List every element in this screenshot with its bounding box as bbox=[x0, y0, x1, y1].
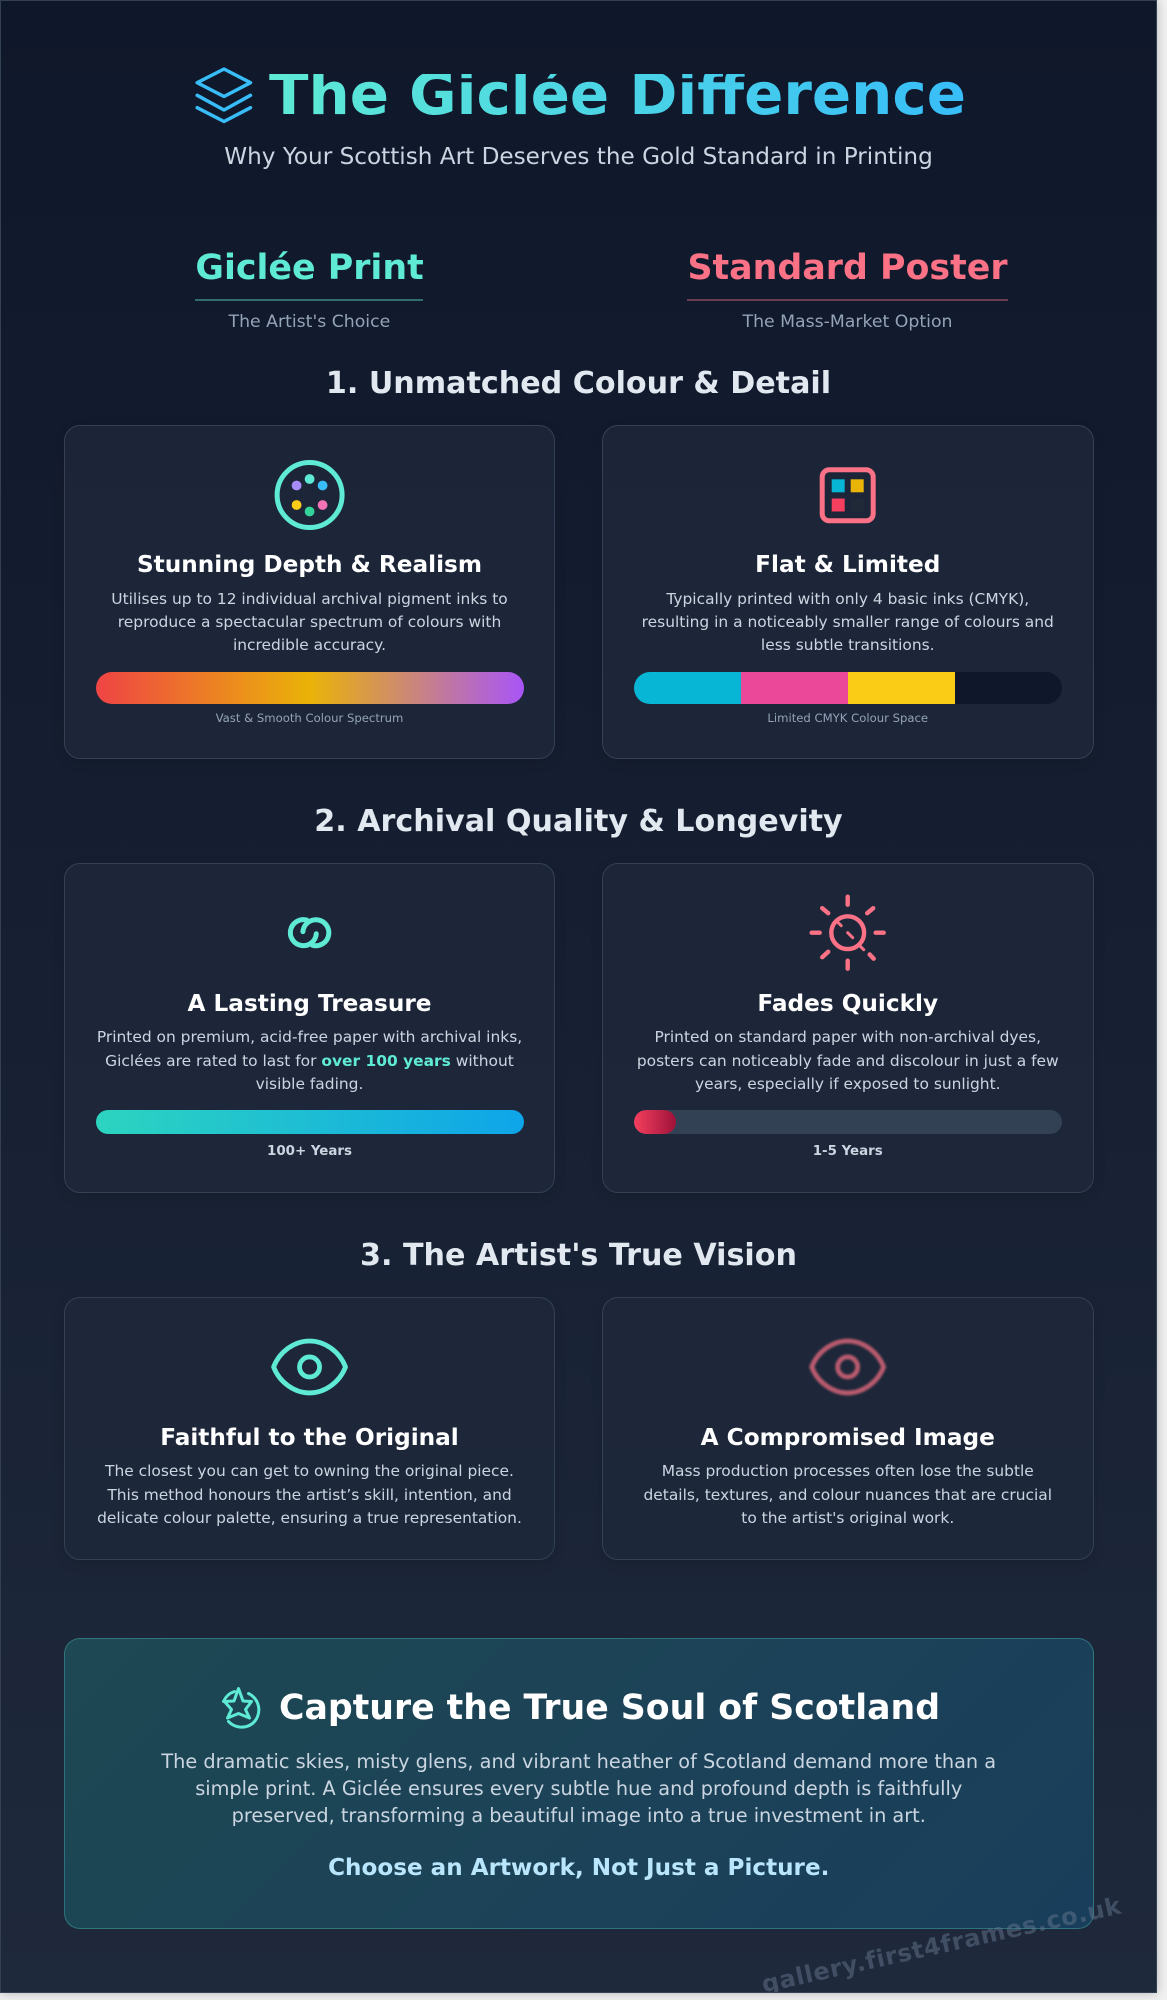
poster subheading: The Mass-Market Option bbox=[743, 312, 952, 332]
cta text: simple print. A Giclée ensures every subtle hue and profound depth is faithfully bbox=[195, 1777, 962, 1800]
bar fill bbox=[634, 1110, 676, 1134]
call to action panel bbox=[64, 1638, 1094, 1929]
card text: Mass production processes often lose the subtle bbox=[662, 1462, 1034, 1480]
card text bbox=[111, 590, 508, 654]
card text bbox=[643, 1462, 1052, 1527]
icon: blurred eye bbox=[808, 1337, 888, 1397]
panel: faithful to the original bbox=[64, 1297, 555, 1560]
card text: reproduce a spectacular spectrum of colours with bbox=[118, 613, 501, 631]
giclée underline bbox=[195, 299, 423, 301]
card text: delicate colour palette, ensuring a true representation. bbox=[97, 1509, 522, 1527]
section heading 3: 3. The Artist's True Vision bbox=[360, 1238, 797, 1273]
icon: cmyk swatch bbox=[820, 467, 876, 524]
card text: Utilises up to 12 individual archival pigment inks to bbox=[111, 590, 508, 608]
cta text: preserved, transforming a beautiful image into a true investment in art. bbox=[232, 1804, 926, 1827]
card title: A Compromised Image bbox=[701, 1424, 995, 1450]
card text: less subtle transitions. bbox=[761, 636, 935, 654]
card text: details, textures, and colour nuances that are crucial bbox=[643, 1486, 1052, 1504]
card text: This method honours the artist’s skill, intention, and bbox=[107, 1486, 512, 1504]
card text: Typically printed with only 4 basic inks (CMYK), bbox=[666, 590, 1029, 608]
bar label: 100+ Years bbox=[267, 1144, 352, 1159]
card text: years, especially if exposed to sunlight. bbox=[695, 1075, 1001, 1093]
card text: Printed on premium, acid-free paper with archival inks, bbox=[97, 1028, 522, 1046]
bar caption: Limited CMYK Colour Space bbox=[767, 711, 928, 725]
bar caption: Vast & Smooth Colour Spectrum bbox=[216, 711, 403, 725]
card title: Flat & Limited bbox=[755, 551, 940, 578]
panel: lasting treasure bbox=[64, 863, 555, 1193]
section heading 2: 2. Archival Quality & Longevity bbox=[314, 804, 843, 839]
card title: Stunning Depth & Realism bbox=[137, 551, 482, 578]
cmyk bar bbox=[634, 672, 1062, 704]
panel: compromised image bbox=[602, 1297, 1094, 1560]
panel: fades quickly bbox=[602, 863, 1094, 1193]
cta text bbox=[161, 1750, 996, 1827]
poster underline bbox=[687, 299, 1008, 301]
card title: Fades Quickly bbox=[757, 990, 938, 1017]
bar label: 1-5 Years bbox=[813, 1144, 883, 1159]
card text: visible fading. bbox=[256, 1075, 363, 1093]
card text: The closest you can get to owning the original piece. bbox=[105, 1462, 514, 1480]
column header: giclée print: Giclée Print bbox=[195, 248, 424, 288]
card title: Faithful to the Original bbox=[160, 1424, 459, 1450]
title icon: stacked layers bbox=[195, 67, 252, 124]
cta text: The dramatic skies, misty glens, and vibrant heather of Scotland demand more than a bbox=[161, 1750, 996, 1773]
card text: Printed on standard paper with non-archival dyes, bbox=[654, 1028, 1041, 1046]
giclée subheading: The Artist's Choice bbox=[229, 312, 390, 332]
subtitle: Why Your Scottish Art Deserves the Gold Standard in Printing bbox=[224, 144, 933, 170]
icon: interlinked rings bbox=[288, 917, 332, 948]
1-5 years bar bbox=[634, 1110, 1062, 1134]
card title: A Lasting Treasure bbox=[188, 990, 432, 1017]
panel: flat and limited bbox=[602, 424, 1094, 758]
section heading 1: 1. Unmatched Colour & Detail bbox=[326, 366, 831, 401]
icon: fading sun bbox=[810, 894, 886, 971]
panel: stunning depth bbox=[64, 424, 555, 758]
card text bbox=[642, 590, 1054, 654]
cta heading: Capture the True Soul of Scotland bbox=[279, 1688, 940, 1728]
icon: palette bbox=[274, 460, 345, 530]
card text: to the artist's original work. bbox=[741, 1509, 954, 1527]
card text bbox=[637, 1028, 1059, 1093]
cta tagline: Choose an Artwork, Not Just a Picture. bbox=[328, 1855, 829, 1881]
card text: posters can noticeably fade and discolour in just a few bbox=[637, 1052, 1059, 1070]
card text: Giclées are rated to last for over 100 years without bbox=[105, 1052, 514, 1070]
card text bbox=[97, 1462, 522, 1527]
icon: star in orbit bbox=[222, 1687, 260, 1729]
card text: incredible accuracy. bbox=[233, 636, 386, 654]
title: The Giclée Difference bbox=[269, 60, 966, 128]
colour spectrum bar bbox=[96, 672, 524, 704]
100+ years bar bbox=[96, 1110, 524, 1134]
icon: clear eye bbox=[271, 1338, 348, 1396]
card text: resulting in a noticeably smaller range of colours and bbox=[642, 613, 1054, 631]
column header: standard poster: Standard Poster bbox=[687, 248, 1008, 288]
card text bbox=[97, 1028, 522, 1093]
